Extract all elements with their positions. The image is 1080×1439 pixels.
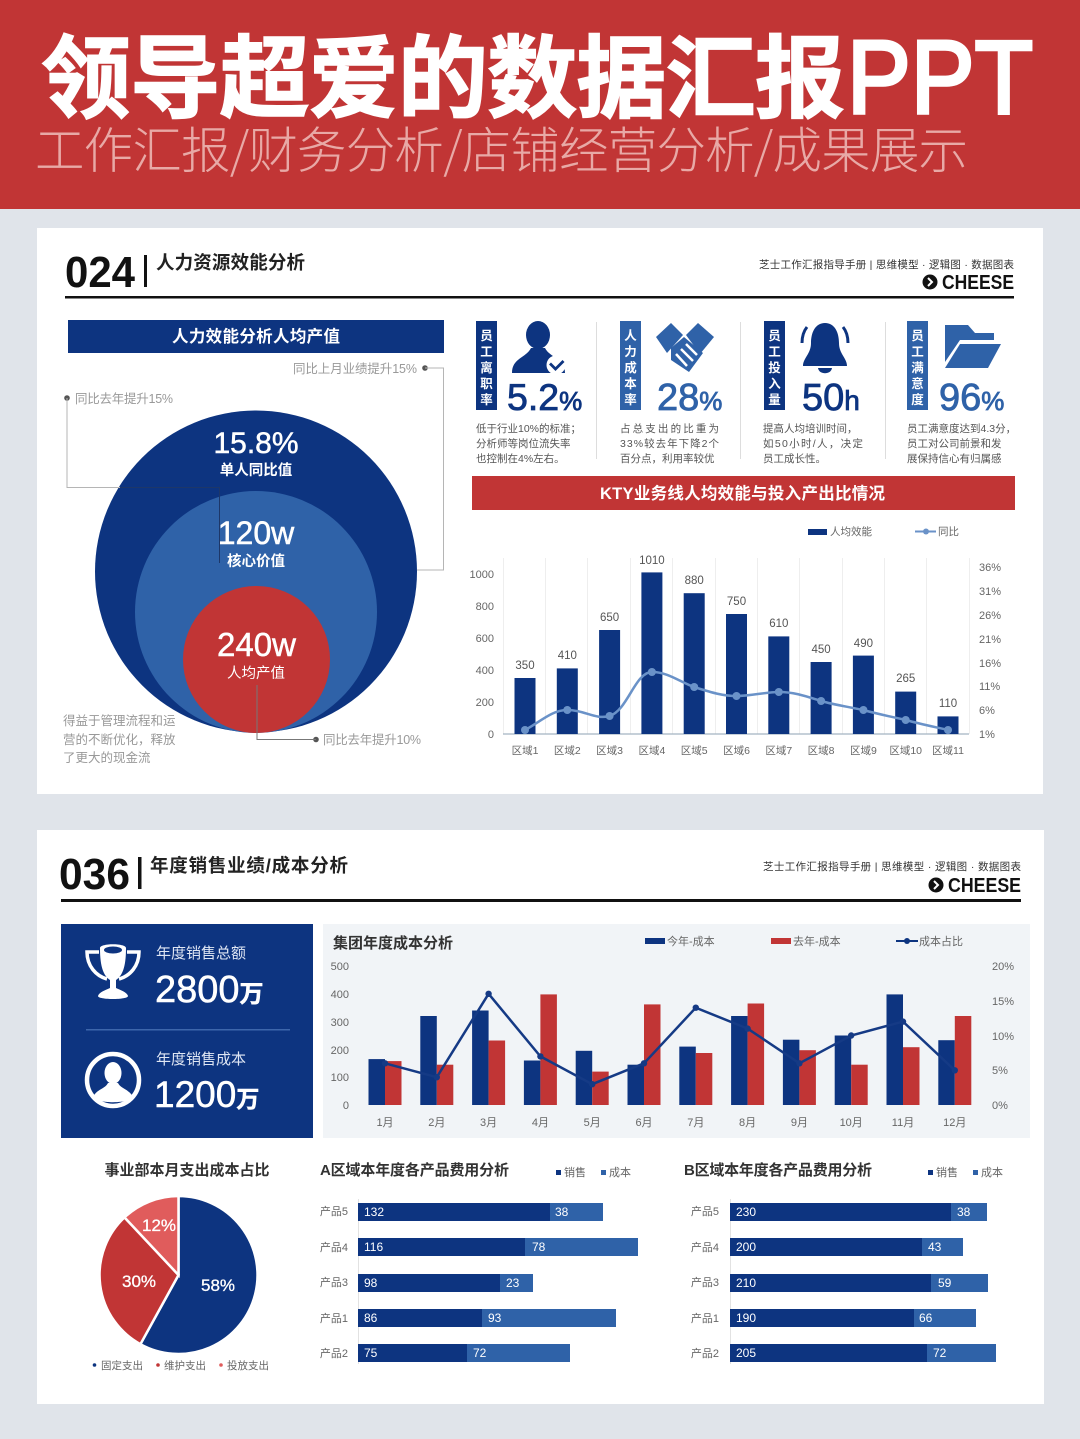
chart: per capita efficiency by region: 265 [896,673,915,685]
chart: annual cost analysis: 集团年度成本分析 [333,934,453,952]
kpi: investment: 量 [768,393,781,407]
kpi: investment: 50h [802,377,860,419]
sales summary panel [61,924,313,1138]
chart: annual cost analysis: 7月 [687,1117,704,1129]
bar chart: region A: 132 [364,1205,384,1219]
kpi: investment: 入 [768,377,781,391]
kpi: labor cost: 33%较去年下降2个 [620,437,720,450]
callout: year on year 15 [64,391,220,563]
chart: per capita efficiency by region: 区域2 [554,744,581,757]
chart: per capita efficiency by region: 1010 [639,555,665,567]
bar chart: region A: 72 [473,1346,487,1360]
chart: per capita efficiency by region: 16% [979,658,1001,670]
title: 领导超爱的数据汇报 [41,30,845,130]
chart legend [808,525,959,538]
chart: per capita efficiency by region: 11% [979,681,1000,693]
chart: per capita efficiency by region: 区域3 [596,744,623,757]
chart: annual cost analysis: 11月 [892,1117,914,1129]
icon: person [512,321,566,374]
chart: per capita efficiency by region: 区域7 [765,744,792,757]
panel: human resources efficiency [37,228,1043,794]
chart: per capita efficiency by region: 1% [979,729,995,741]
kpi: labor cost: 力 [624,344,637,359]
bar chart: region A: 产品2 [320,1346,348,1360]
chart: per capita efficiency by region: 1000 [470,569,494,581]
bar chart: region B: 200 [736,1240,756,1254]
chart: per capita efficiency by region: 450 [812,644,831,656]
bar chart: region B: 210 [736,1276,756,1290]
banner: per capita output: 人力效能分析人均产值 [172,326,340,346]
pie legend: 固定支出 [101,1359,143,1372]
kpi: investment [763,321,864,465]
chart: annual cost analysis: 5% [992,1065,1008,1077]
chart: per capita efficiency by region: 350 [515,660,535,672]
banner: per capita output [68,320,444,353]
banner: KTY: KTY业务线人均效能与投入产出比情况 [600,483,886,503]
note text: 营的不断优化，释放 [63,732,176,747]
bar chart: region B: 产品2 [691,1346,719,1360]
chart legend: 销售 [564,1165,586,1179]
kpi: investment: 投 [768,361,781,375]
bar chart: region A [320,1161,638,1364]
chart: annual cost analysis: 6月 [635,1117,653,1129]
bar chart: region B: 230 [736,1205,756,1219]
pie legend: 投放支出 [227,1359,269,1372]
pie chart: monthly expense share: 事业部本月支出成本占比 [104,1161,270,1179]
chart legend: 人均效能 [830,525,872,538]
bar chart: region A: 产品3 [320,1275,348,1289]
chart: annual cost analysis: 400 [331,989,349,1001]
chart: annual cost analysis: 12月 [943,1117,966,1129]
icon: trophy [87,944,139,999]
chart legend [928,1165,1003,1179]
kpi: satisfaction: 意 [911,376,924,391]
bar chart: region B: 产品1 [691,1311,719,1325]
bar chart: region B [684,1161,1003,1364]
bar chart: region B: 43 [928,1240,942,1254]
chart: per capita efficiency by region: 0 [488,729,494,741]
kpi: satisfaction: 员 [911,329,924,343]
chart: per capita efficiency by region: 600 [476,633,494,645]
bar chart: region A: 产品4 [320,1240,348,1254]
kpi: turnover: 职 [480,377,493,391]
chart: annual cost analysis: 500 [331,961,349,973]
bar chart: region B: 72 [933,1346,947,1360]
chart: per capita efficiency by region: 31% [979,586,1001,598]
pie chart: monthly expense share [93,1161,270,1372]
bar chart: region A: A区域本年度各产品费用分析 [320,1161,509,1179]
kpi: satisfaction: 员工对公司前景和发 [907,437,1002,450]
chart: per capita efficiency by region: 200 [476,697,494,709]
kpi: satisfaction: 工 [911,345,924,359]
kpi: satisfaction: 96% [939,377,1004,419]
chart: per capita efficiency by region: 400 [476,665,494,677]
brand block [763,860,1022,897]
chart: annual cost analysis: 1月 [376,1117,394,1129]
chart: annual cost analysis: 0 [343,1100,349,1112]
concentric circles: 240w [217,626,296,663]
concentric circles: 核心价值 [227,552,285,570]
sales summary panel: 年度销售成本 [156,1051,246,1068]
chart: per capita efficiency by region: 区域9 [850,744,877,757]
kpi: satisfaction [907,321,1016,465]
kpi: investment: 工 [768,345,781,359]
icon: user circle [87,1054,139,1106]
chart: per capita efficiency by region: 490 [854,638,873,650]
chart: annual cost analysis: 3月 [480,1117,497,1129]
chart: annual cost analysis: 100 [331,1072,349,1084]
brand block: 芝士工作汇报指导手册 | 思维模型 · 逻辑图 · 数据图表 [763,860,1022,873]
banner: KTY [472,476,1015,510]
brand block [759,258,1014,294]
panel: annual sales and cost [37,830,1044,1404]
sales summary panel: 1200万 [154,1074,259,1115]
chart: annual cost analysis: 0% [992,1100,1008,1112]
chart: annual cost analysis: 5月 [584,1117,601,1129]
chart: per capita efficiency by region: 区域10 [889,744,922,757]
chart: per capita efficiency by region: 6% [979,705,995,717]
bar chart: region B: 59 [938,1276,952,1290]
callout: month on month: 同比上月业绩提升15% [293,361,417,376]
bar chart: region A: 23 [506,1276,520,1290]
kpi: investment: 员工成长性。 [763,452,826,465]
chart legend: 成本 [609,1165,631,1179]
chart legend [645,934,963,948]
chart legend: 同比 [938,525,959,538]
bar chart: region B: 38 [957,1205,971,1219]
chart legend: 成本 [981,1165,1003,1179]
chart: per capita efficiency by region: 650 [600,612,619,624]
chart legend: 销售 [936,1165,958,1179]
bar chart: region A: 93 [488,1311,502,1325]
kpi: turnover: 离 [480,360,493,375]
pie chart: monthly expense share: 12% [142,1216,176,1235]
pie legend [93,1359,269,1372]
chart legend: 今年-成本 [667,934,715,948]
bar chart: region A: 产品5 [320,1204,348,1218]
chart: per capita efficiency by region: 36% [979,562,1001,574]
chart: per capita efficiency by region: 110 [939,698,957,710]
pie chart: monthly expense share: 58% [201,1276,235,1295]
bar chart: region B: 产品3 [691,1275,719,1289]
chart: annual cost analysis: 15% [992,996,1014,1008]
kpi: turnover: 低于行业10%的标准； [476,422,581,435]
chart: per capita efficiency by region: 750 [727,596,746,608]
chart: per capita efficiency by region: 区域4 [638,744,665,757]
section heading: 年度销售业绩/成本分析 [150,855,348,876]
subtitle: 工作汇报/财务分析/店铺经营分析/成果展示 [35,112,968,183]
chart: per capita efficiency by region: 区域8 [808,744,835,757]
note text: 了更大的现金流 [63,750,151,765]
kpi: turnover: 5.2% [507,376,582,418]
kpi: labor cost: 占总支出的比重为 [620,422,719,435]
bar chart: region A: 86 [364,1311,378,1325]
pie legend: 维护支出 [164,1359,206,1372]
concentric circles: 单人同比值 [220,462,293,479]
kpi: turnover: 工 [480,345,493,359]
note text: 得益于管理流程和运 [63,713,176,728]
callout: month on month [293,361,444,570]
kpi: satisfaction: 满 [911,360,924,375]
title [41,20,1033,136]
kpi: investment: 员 [768,329,781,343]
bar chart: region B: 产品4 [691,1240,719,1254]
chart: annual cost analysis: 20% [992,961,1014,973]
chart: annual cost analysis: 9月 [791,1117,808,1129]
brand block: 芝士工作汇报指导手册 | 思维模型 · 逻辑图 · 数据图表 [759,258,1014,271]
chart: per capita efficiency by region: 区域6 [723,744,750,757]
header banner [0,0,1080,209]
kpi: satisfaction: 员工满意度达到4.3分， [907,422,1016,435]
chart: annual cost analysis: 300 [331,1017,349,1029]
concentric circles: 15.8% [213,427,299,460]
bar chart: region B: 190 [736,1311,756,1325]
bar chart: region A: 116 [364,1240,383,1254]
icon: handshake [656,323,714,372]
chart: per capita efficiency by region: 区域1 [512,744,539,757]
bar chart: region A: 78 [532,1240,546,1254]
kpi: labor cost: 人 [624,329,637,343]
section number 036: 036 [59,850,130,899]
kpi: turnover [476,321,582,465]
title: PPT [847,20,1033,136]
callout: year on year 10 [257,685,421,747]
bar chart: region B: 205 [736,1346,756,1360]
concentric circles: 120w [218,515,295,551]
chart: annual cost analysis: 8月 [739,1117,756,1129]
kpi: labor cost: 百分点，利用率较优 [620,452,714,465]
chart: per capita efficiency by region: 区域5 [681,744,708,757]
chart: per capita efficiency by region: 410 [558,650,577,662]
kpi: turnover: 率 [480,392,493,407]
kpi: turnover: 分析师等岗位流失率 [476,437,570,450]
kpi: investment: 如50小时/人，决定 [763,437,864,450]
chart: annual cost analysis: 4月 [532,1117,549,1129]
chart: per capita efficiency by region [470,525,1001,757]
chart: annual cost analysis: 2月 [428,1117,445,1129]
kpi: labor cost: 本 [624,376,637,391]
callout: year on year 15: 同比去年提升15% [75,391,173,406]
chart: per capita efficiency by region: 26% [979,610,1001,622]
kpi: satisfaction: 度 [911,392,924,407]
bar chart: region A: 38 [555,1205,569,1219]
chart: per capita efficiency by region: 800 [476,601,494,613]
chart legend [556,1165,631,1179]
kpi: turnover: 员 [480,329,493,343]
brand block: CHEESE [942,272,1014,294]
kpi: labor cost: 率 [624,392,637,407]
bar chart: region A: 75 [364,1346,378,1360]
bar chart: region A: 98 [364,1276,378,1290]
chart: annual cost analysis: 10% [992,1031,1014,1043]
kpi: satisfaction: 展保持信心有归属感 [907,452,1002,465]
chart: per capita efficiency by region: 区域11 [932,744,964,757]
chart: annual cost analysis: 10月 [840,1117,863,1129]
bar chart: region B: 66 [919,1311,933,1325]
icon: bell [802,323,848,373]
brand block: CHEESE [948,875,1021,897]
note text [63,713,176,765]
concentric circles: 人均产值 [227,665,285,682]
kpi: labor cost [620,321,722,465]
bar chart: region B: B区域本年度各产品费用分析 [684,1161,872,1179]
callout: year on year 10: 同比去年提升10% [323,732,421,747]
sales summary panel: 年度销售总额 [156,945,246,962]
icon: folder [945,325,1001,368]
chart legend: 去年-成本 [793,934,841,948]
sales summary panel: 2800万 [155,969,264,1011]
pie chart: monthly expense share: 30% [122,1272,156,1291]
chart: annual cost analysis: 200 [331,1045,349,1057]
chart: annual cost analysis [323,924,1030,1138]
chart: per capita efficiency by region: 610 [769,618,788,630]
bar chart: region A: 产品1 [320,1311,348,1325]
chart legend: 成本占比 [919,934,963,948]
section heading: 人力资源效能分析 [156,252,305,273]
section number 024: 024 [65,248,135,297]
kpi: investment: 提高人均培训时间， [763,422,858,435]
kpi: turnover: 也控制在4%左右。 [476,452,565,465]
chart: per capita efficiency by region: 21% [979,634,1001,646]
bar chart: region B: 产品5 [691,1204,719,1218]
kpi: labor cost: 成 [624,360,637,375]
chart: per capita efficiency by region: 880 [685,575,704,587]
kpi: labor cost: 28% [657,377,722,419]
concentric circles [95,410,417,733]
